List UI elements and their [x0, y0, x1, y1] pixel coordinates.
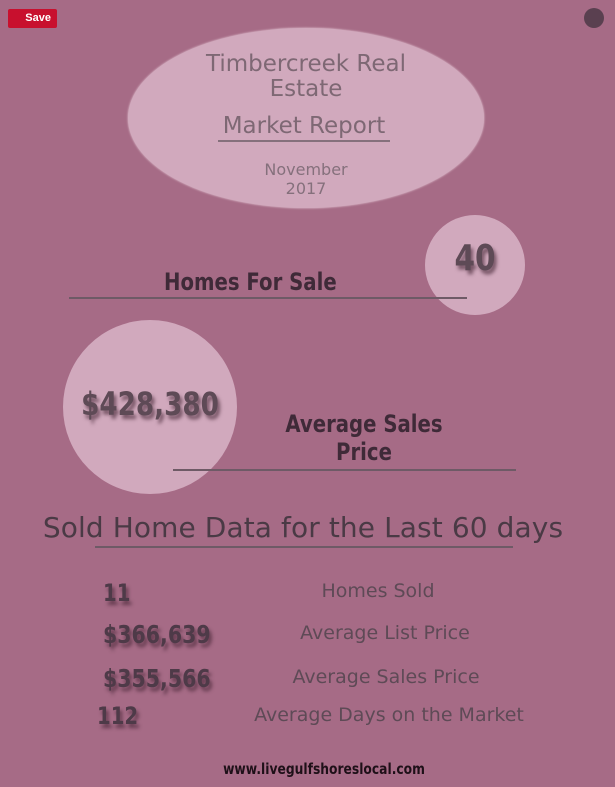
section heading: Sold Home Data for the Last 60 days	[43, 511, 563, 544]
title	[206, 51, 406, 102]
data rows: 112	[97, 702, 138, 730]
subtitle: Market Report	[223, 113, 385, 139]
avg sales price: Price	[336, 438, 392, 466]
homes for sale: Homes For Sale	[164, 268, 337, 296]
data rows: Average Days on the Market	[254, 704, 524, 726]
save button: Save	[25, 12, 51, 24]
data rows	[97, 579, 524, 730]
big circle	[63, 320, 237, 494]
date: 2017	[286, 179, 326, 198]
header ellipse	[128, 28, 484, 208]
date: November	[264, 160, 348, 179]
save button	[8, 9, 57, 28]
data rows: Average Sales Price	[292, 666, 480, 688]
data rows: $355,566	[103, 664, 211, 693]
icon: fullscreen	[584, 8, 604, 28]
circle: 40	[425, 215, 525, 315]
avg sales price: Average Sales	[285, 410, 443, 438]
footer url: www.livegulfshoreslocal.com	[223, 760, 425, 778]
date	[264, 160, 348, 198]
title: Estate	[270, 76, 342, 102]
data rows: Average List Price	[300, 622, 470, 644]
number 40: 40	[454, 238, 496, 279]
data rows: 11	[103, 579, 130, 607]
428,380: $428,380	[81, 385, 219, 423]
title: Timbercreek Real	[206, 51, 406, 77]
data rows: $366,639	[103, 620, 211, 649]
avg sales price	[285, 410, 443, 466]
data rows: Homes Sold	[321, 580, 435, 602]
